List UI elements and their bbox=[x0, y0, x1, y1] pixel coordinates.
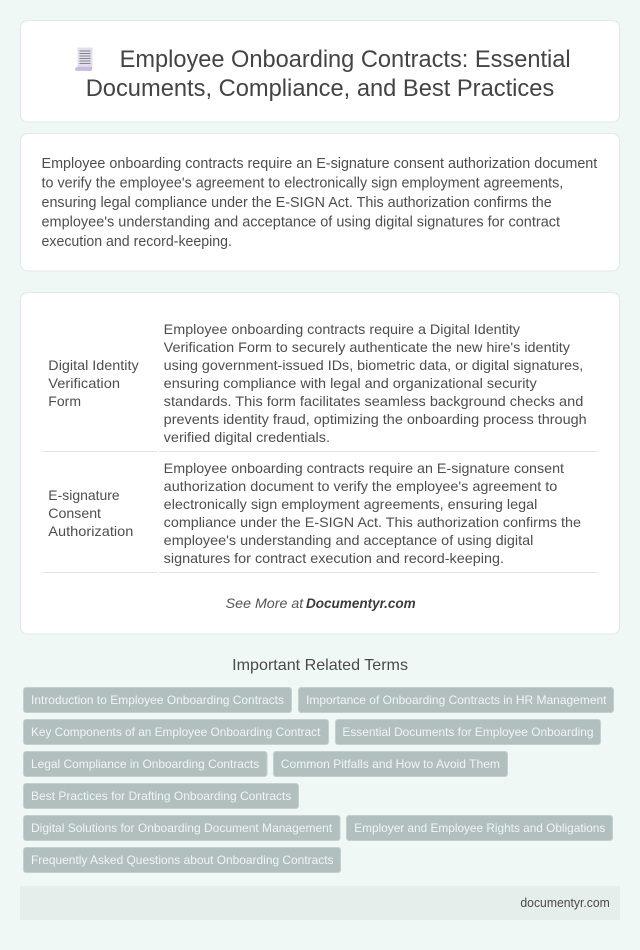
intro paragraph: execution and record-keeping. bbox=[42, 234, 232, 250]
row description: electronically sign employment agreements, ensuring legal bbox=[164, 496, 537, 512]
chip: Legal Compliance in Onboarding Contracts bbox=[31, 757, 259, 771]
title: Employee Onboarding Contracts: Essential bbox=[120, 46, 571, 73]
chip: Employer and Employee Rights and Obligations bbox=[354, 821, 605, 835]
panel: intro text card bbox=[20, 134, 620, 271]
title: Documents, Compliance, and Best Practices bbox=[86, 75, 554, 102]
row description: Employee onboarding contracts require a Digital Identity bbox=[164, 321, 520, 337]
row description: authorization document to verify the employee's agreement to bbox=[164, 478, 558, 494]
table row: Digital Identity Verification Form bbox=[43, 321, 597, 452]
row label: Verification bbox=[48, 375, 120, 391]
chip bbox=[24, 816, 340, 840]
row description: signatures for contract execution and record-keeping. bbox=[164, 550, 504, 566]
row description: standards. This form facilitates seamless background checks and bbox=[164, 393, 583, 409]
row label: Digital Identity bbox=[48, 357, 139, 373]
row label: Consent bbox=[48, 505, 101, 521]
panel: title card bbox=[20, 20, 620, 122]
row description bbox=[164, 321, 587, 445]
row label: Form bbox=[48, 393, 81, 409]
chip: Essential Documents for Employee Onboarding bbox=[342, 725, 594, 739]
footer bar bbox=[20, 886, 620, 920]
intro paragraph: to verify the employee's agreement to electronically sign employment agreements, bbox=[42, 176, 563, 192]
chip: Key Components of an Employee Onboarding Contract bbox=[31, 725, 321, 739]
row description: verified digital credentials. bbox=[164, 429, 330, 445]
panel: document table card bbox=[20, 292, 620, 634]
footer bar: documentyr.com bbox=[520, 895, 610, 910]
see more link: See More at bbox=[226, 595, 304, 611]
chip bbox=[336, 720, 600, 744]
intro paragraph: employee's understanding and acceptance of using digital signatures for contract bbox=[42, 214, 560, 230]
table row: E-signature Consent Authorization bbox=[43, 460, 597, 573]
chip bbox=[24, 752, 267, 776]
chip bbox=[24, 784, 298, 808]
chip: Common Pitfalls and How to Avoid Them bbox=[281, 757, 500, 771]
chip: Best Practices for Drafting Onboarding Contracts bbox=[31, 789, 291, 803]
row description: compliance under the E-SIGN Act. This authorization confirms the bbox=[164, 514, 581, 530]
row description: employee's understanding and acceptance of using digital bbox=[164, 532, 533, 548]
chip bbox=[298, 688, 614, 712]
chip bbox=[274, 752, 508, 776]
intro paragraph: ensuring legal compliance under the E-SIGN Act. This authorization confirms the bbox=[42, 195, 552, 211]
see more link bbox=[226, 595, 416, 611]
row label bbox=[48, 487, 133, 539]
panel: related term chips bbox=[24, 688, 614, 872]
title bbox=[86, 46, 571, 102]
row label: E-signature bbox=[48, 487, 120, 503]
chip bbox=[24, 848, 340, 872]
chip: Digital Solutions for Onboarding Document Management bbox=[31, 821, 333, 835]
heading: important related terms: Important Related Terms bbox=[232, 657, 408, 674]
row label bbox=[48, 357, 139, 409]
row description: using government-issued IDs, biometric data, or digital signatures, bbox=[164, 357, 583, 373]
row description: prevents identity fraud, optimizing the onboarding process through bbox=[164, 411, 587, 427]
row description: Employee onboarding contracts require an E-signature consent bbox=[164, 460, 564, 476]
intro paragraph: Employee onboarding contracts require an E-signature consent authorization document bbox=[42, 156, 597, 172]
row description: Verification Form to securely authenticate the new hire's identity bbox=[164, 339, 570, 355]
chip bbox=[24, 720, 328, 744]
row description bbox=[164, 460, 581, 566]
see more link: Documentyr.com bbox=[306, 595, 416, 611]
intro paragraph bbox=[42, 156, 597, 250]
chip bbox=[346, 816, 612, 840]
icon: document scroll bbox=[75, 48, 92, 71]
chip: Introduction to Employee Onboarding Contracts bbox=[31, 693, 284, 707]
chip bbox=[24, 688, 292, 712]
row label: Authorization bbox=[48, 523, 133, 539]
chip: Frequently Asked Questions about Onboarding Contracts bbox=[31, 853, 334, 867]
chip: Importance of Onboarding Contracts in HR Management bbox=[306, 693, 607, 707]
row description: ensuring compliance with legal and organizational security bbox=[164, 375, 537, 391]
